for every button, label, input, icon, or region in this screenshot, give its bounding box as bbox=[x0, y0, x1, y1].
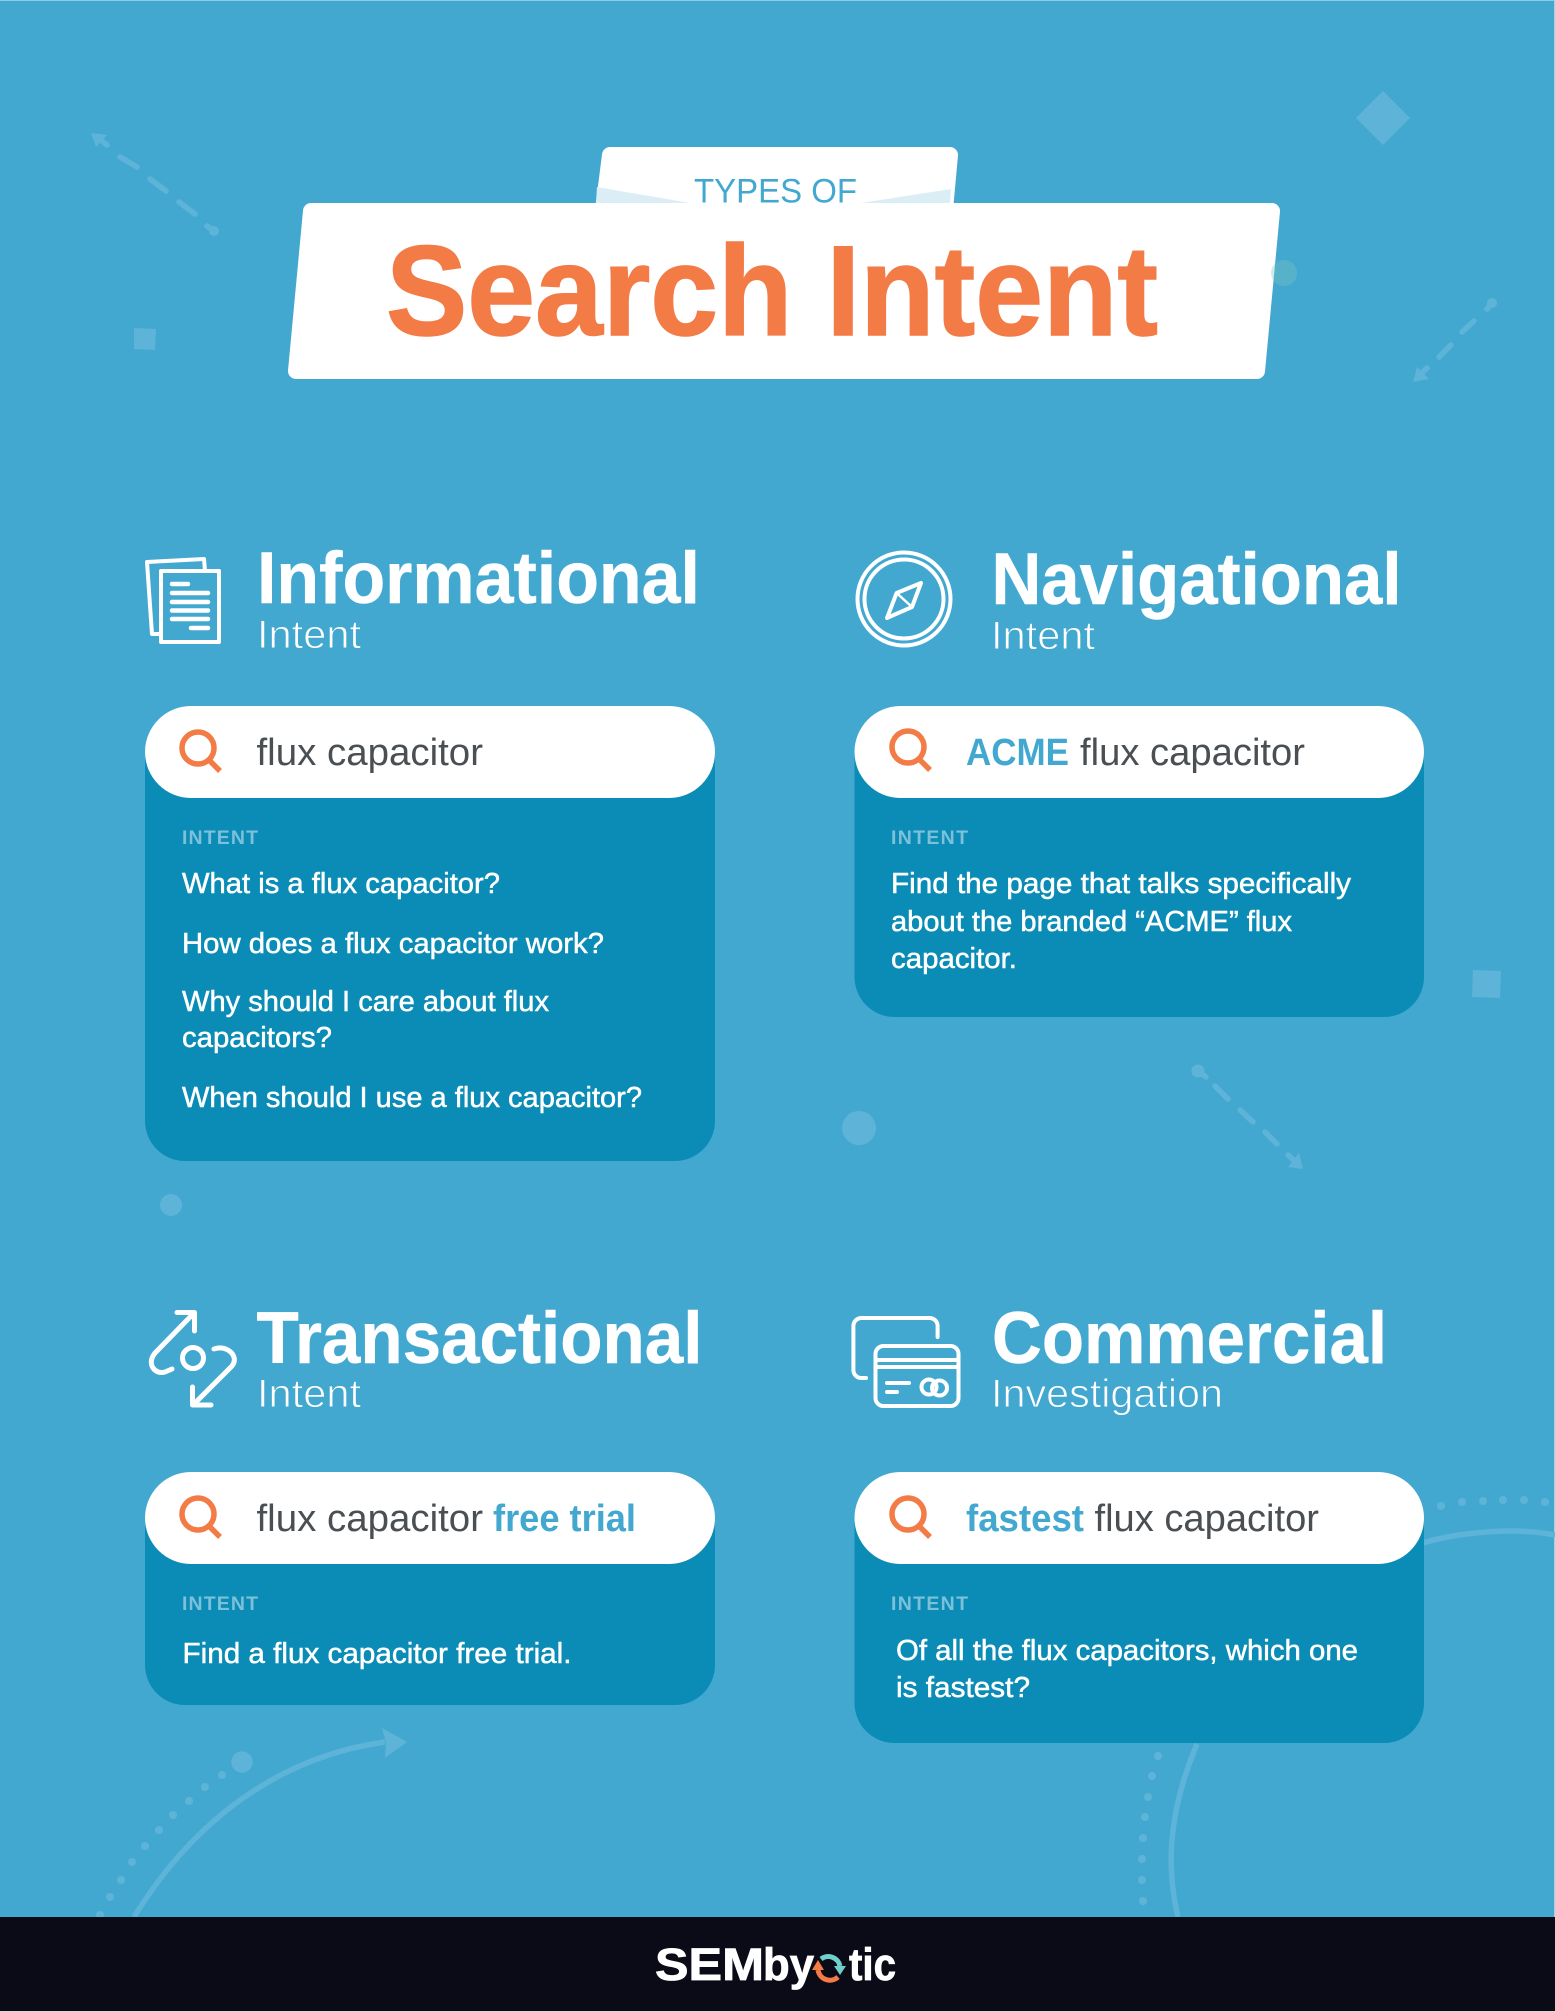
icon: magnifier bbox=[892, 731, 930, 770]
question list: What is a flux capacitor? bbox=[182, 868, 500, 900]
answer panel bbox=[145, 750, 715, 1161]
answer panel bbox=[854, 750, 1424, 1017]
section: informational intent bbox=[145, 538, 715, 1161]
heading: Navigational bbox=[992, 539, 1402, 620]
eyebrow: types of: TYPES OF bbox=[694, 172, 857, 210]
translucent circle bbox=[1271, 260, 1297, 286]
icon: credit cards bbox=[853, 1318, 958, 1406]
icon: magnifier bbox=[182, 732, 220, 771]
answer panel bbox=[854, 1516, 1424, 1743]
icon: magnifier bbox=[892, 1498, 930, 1537]
search query: free trial bbox=[493, 1498, 636, 1540]
curved line: bottom right bbox=[1171, 1744, 1197, 1917]
logo: SEMbyotic bbox=[655, 1939, 896, 1990]
question list: When should I use a flux capacitor? bbox=[182, 1082, 642, 1114]
search pill bbox=[145, 1472, 715, 1564]
dashed arrow: centre right bbox=[1192, 1064, 1303, 1169]
tab shading: left bbox=[596, 187, 690, 203]
description: Find the page that talks specifically bbox=[891, 868, 1352, 900]
search pill bbox=[854, 706, 1424, 798]
tab shading: right bbox=[861, 189, 951, 203]
answer panel bbox=[145, 1516, 715, 1705]
subheading: Intent bbox=[257, 613, 361, 657]
question list bbox=[182, 868, 642, 1114]
icon: logo refresh arrows bbox=[812, 1957, 846, 1980]
search pill bbox=[145, 706, 715, 798]
description: is fastest? bbox=[896, 1672, 1030, 1704]
label: intent: INTENT bbox=[182, 827, 258, 849]
dotted line: bottom right bbox=[1138, 1752, 1162, 1905]
title banner bbox=[296, 155, 1297, 371]
dashed arrow: top left bbox=[91, 133, 219, 236]
square: right middle bbox=[1472, 970, 1501, 998]
curved arrow: bottom left bbox=[134, 1728, 407, 1917]
search query bbox=[966, 1498, 1319, 1540]
search query bbox=[966, 732, 1305, 774]
question list: How does a flux capacitor work? bbox=[182, 928, 604, 960]
heading: Commercial bbox=[992, 1298, 1387, 1379]
search query bbox=[256, 1498, 636, 1540]
icon: compass bbox=[858, 552, 950, 646]
question list: Why should I care about flux bbox=[182, 986, 549, 1018]
search query: flux capacitor bbox=[256, 1498, 483, 1540]
description: capacitor. bbox=[891, 943, 1017, 975]
logo: SEMbyotic: by bbox=[763, 1939, 814, 1990]
label: intent: INTENT bbox=[891, 1593, 968, 1615]
description: Find a flux capacitor free trial. bbox=[182, 1638, 572, 1670]
description bbox=[891, 868, 1352, 975]
logo: SEMbyotic: SEM bbox=[655, 1939, 764, 1990]
search query: flux capacitor bbox=[1094, 1498, 1319, 1540]
question list: capacitors? bbox=[182, 1022, 332, 1054]
search query: flux capacitor bbox=[256, 732, 483, 774]
icon: magnifier bbox=[182, 1498, 220, 1537]
logo: SEMbyotic: tic bbox=[849, 1939, 896, 1990]
icon: documents bbox=[147, 559, 219, 642]
subheading: Intent bbox=[257, 1372, 361, 1416]
heading: Transactional bbox=[256, 1298, 702, 1379]
diamond: top right bbox=[1356, 91, 1410, 145]
description: about the branded “ACME” flux bbox=[891, 906, 1292, 938]
description: Of all the flux capacitors, which one bbox=[896, 1635, 1358, 1667]
main title panel bbox=[296, 211, 1272, 371]
curved line: right bbox=[1420, 1531, 1555, 1544]
section: navigational intent bbox=[854, 539, 1424, 1017]
search pill bbox=[854, 1472, 1424, 1564]
section: transactional intent bbox=[145, 1298, 715, 1705]
label: intent: INTENT bbox=[182, 1593, 258, 1615]
label: intent: INTENT bbox=[891, 827, 968, 849]
subheading: Intent bbox=[991, 614, 1095, 658]
dotted line: bottom left bbox=[96, 1751, 253, 1919]
footer bar bbox=[0, 1917, 1555, 2012]
heading: Informational bbox=[257, 538, 700, 619]
search query: fastest bbox=[966, 1498, 1084, 1540]
dashed arrow: top right bbox=[1413, 298, 1497, 382]
circle: centre bbox=[842, 1111, 876, 1145]
dotted line: right bbox=[1437, 1496, 1549, 1510]
description bbox=[896, 1635, 1358, 1704]
circle: left bbox=[160, 1194, 182, 1216]
search query: ACME bbox=[966, 732, 1069, 774]
icon: exchange arrows bbox=[151, 1312, 234, 1405]
tab behind the title bbox=[603, 155, 950, 210]
square: top left bbox=[134, 328, 156, 350]
title text: Search Intent bbox=[386, 220, 1158, 363]
search query: flux capacitor bbox=[1080, 732, 1305, 774]
section: commercial investigation bbox=[853, 1298, 1424, 1743]
subheading: Investigation bbox=[991, 1372, 1223, 1416]
